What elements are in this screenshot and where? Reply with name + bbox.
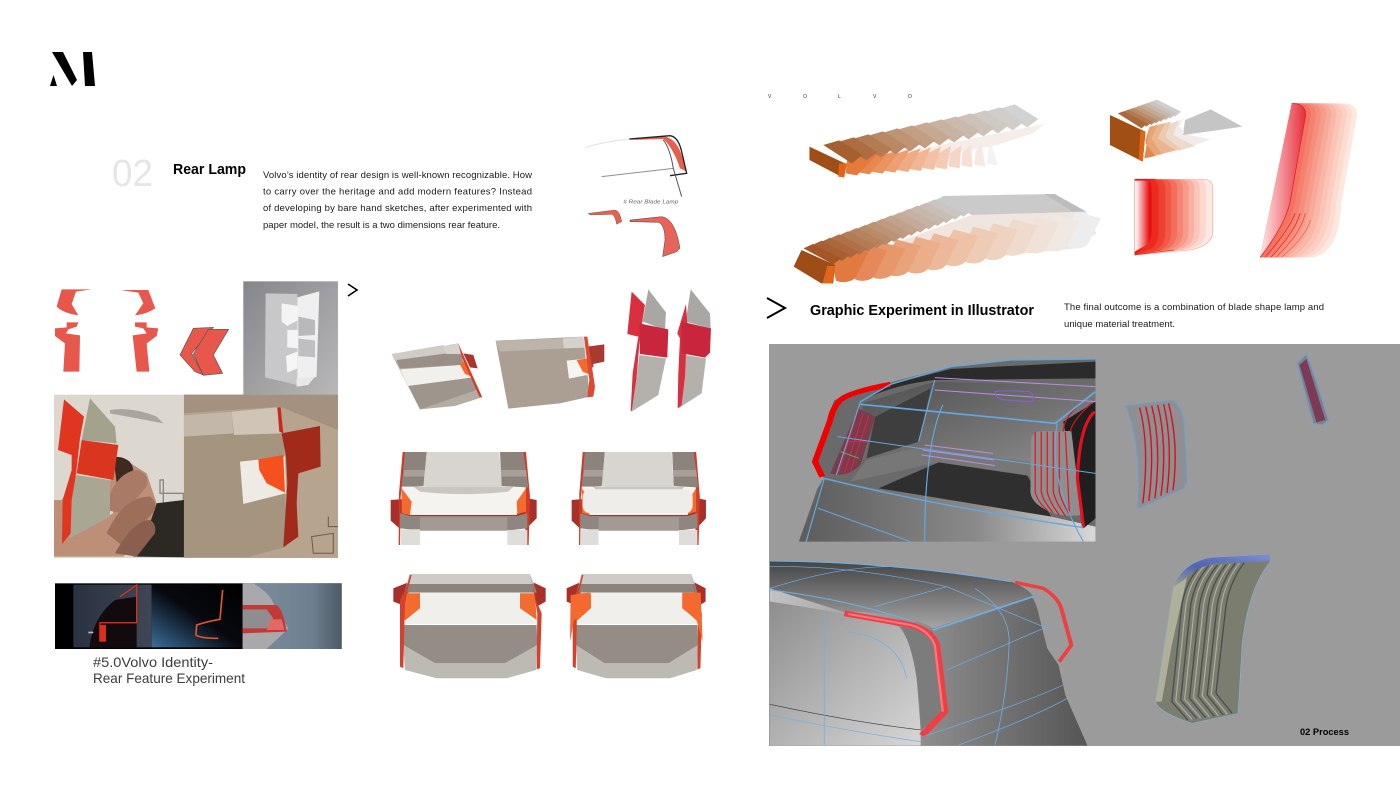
paper model 4	[677, 289, 711, 408]
label: VOLVO spaced letters: L	[838, 94, 841, 100]
CAD part: ribbed lamp solid	[1156, 554, 1270, 723]
caption: #5.0 Volvo identity: #5.0Volvo Identity-	[93, 654, 213, 670]
text block: final outcome	[1064, 302, 1324, 330]
paper cut-outs: red lamp shapes	[55, 289, 229, 375]
label: VOLVO spaced letters: O	[908, 94, 912, 100]
text block: final outcome: The final outcome is a combination of blade shape lamp and	[1064, 302, 1324, 313]
front model A	[391, 452, 537, 545]
text block: intro paragraph: Volvo’s identity of rear design is well-known recognizable. How	[263, 170, 532, 181]
label: VOLVO spaced letters	[768, 94, 912, 100]
caption: #5.0 Volvo identity	[93, 654, 245, 686]
text block: intro paragraph	[263, 170, 532, 231]
graphic: orange stepped fan 3	[1110, 100, 1242, 162]
heading: Graphic Experiment in Illustrator: Graphic Experiment in Illustrator	[810, 303, 1034, 319]
label: 02 Process: 02 Process	[1300, 727, 1349, 737]
text block: intro paragraph: to carry over the heritage and add modern features? Instead	[263, 186, 532, 198]
graphic: orange stepped fan 2	[794, 194, 1101, 283]
graphic: red blade fan small	[1135, 179, 1213, 255]
front model C	[393, 573, 546, 678]
sketches: lamp drawings: # Rear Blade Lamp	[623, 200, 678, 206]
text block: final outcome: unique material treatment.	[1064, 319, 1175, 330]
sketches: lamp drawings	[585, 136, 687, 257]
paper model 1	[392, 343, 482, 409]
chevron arrow: right section	[767, 298, 785, 318]
paper model 2	[496, 337, 604, 409]
CAD render: car body with red blade lamp	[770, 561, 1087, 746]
graphic: red blade fan large	[1260, 103, 1357, 257]
label: VOLVO spaced letters: V	[873, 94, 877, 100]
heading: Rear Lamp: Rear Lamp	[173, 162, 246, 178]
label: VOLVO spaced letters: V	[768, 94, 772, 100]
image strip: Volvo rear lamps	[55, 583, 342, 649]
caption: #5.0 Volvo identity: Rear Feature Experiment	[93, 670, 245, 686]
paper models: front views	[391, 452, 706, 678]
front model B	[572, 452, 706, 545]
graphic: orange stepped fan 1	[809, 104, 1045, 178]
CAD part: small lamp wireframe	[1297, 354, 1329, 425]
paper models: angled views row	[392, 289, 711, 412]
CAD part: lamp surface with ribs	[1126, 400, 1187, 509]
paper model 3	[627, 289, 668, 412]
front model D	[567, 573, 706, 678]
text block: intro paragraph: of developing by bare hand sketches, after experimented with	[263, 203, 532, 214]
panel: grey CAD background	[769, 344, 1400, 746]
label: VOLVO spaced letters: O	[803, 94, 807, 100]
logo mark	[50, 52, 95, 86]
section number: 02	[112, 153, 153, 195]
CAD render: car rear with lamp wireframes	[799, 359, 1095, 542]
text block: intro paragraph: paper model, the result is a two dimensions rear feature.	[263, 220, 500, 231]
photo: paper model held in hand	[54, 395, 338, 558]
photo: white paper relief model	[243, 281, 338, 395]
chevron arrow: left section	[348, 284, 357, 296]
